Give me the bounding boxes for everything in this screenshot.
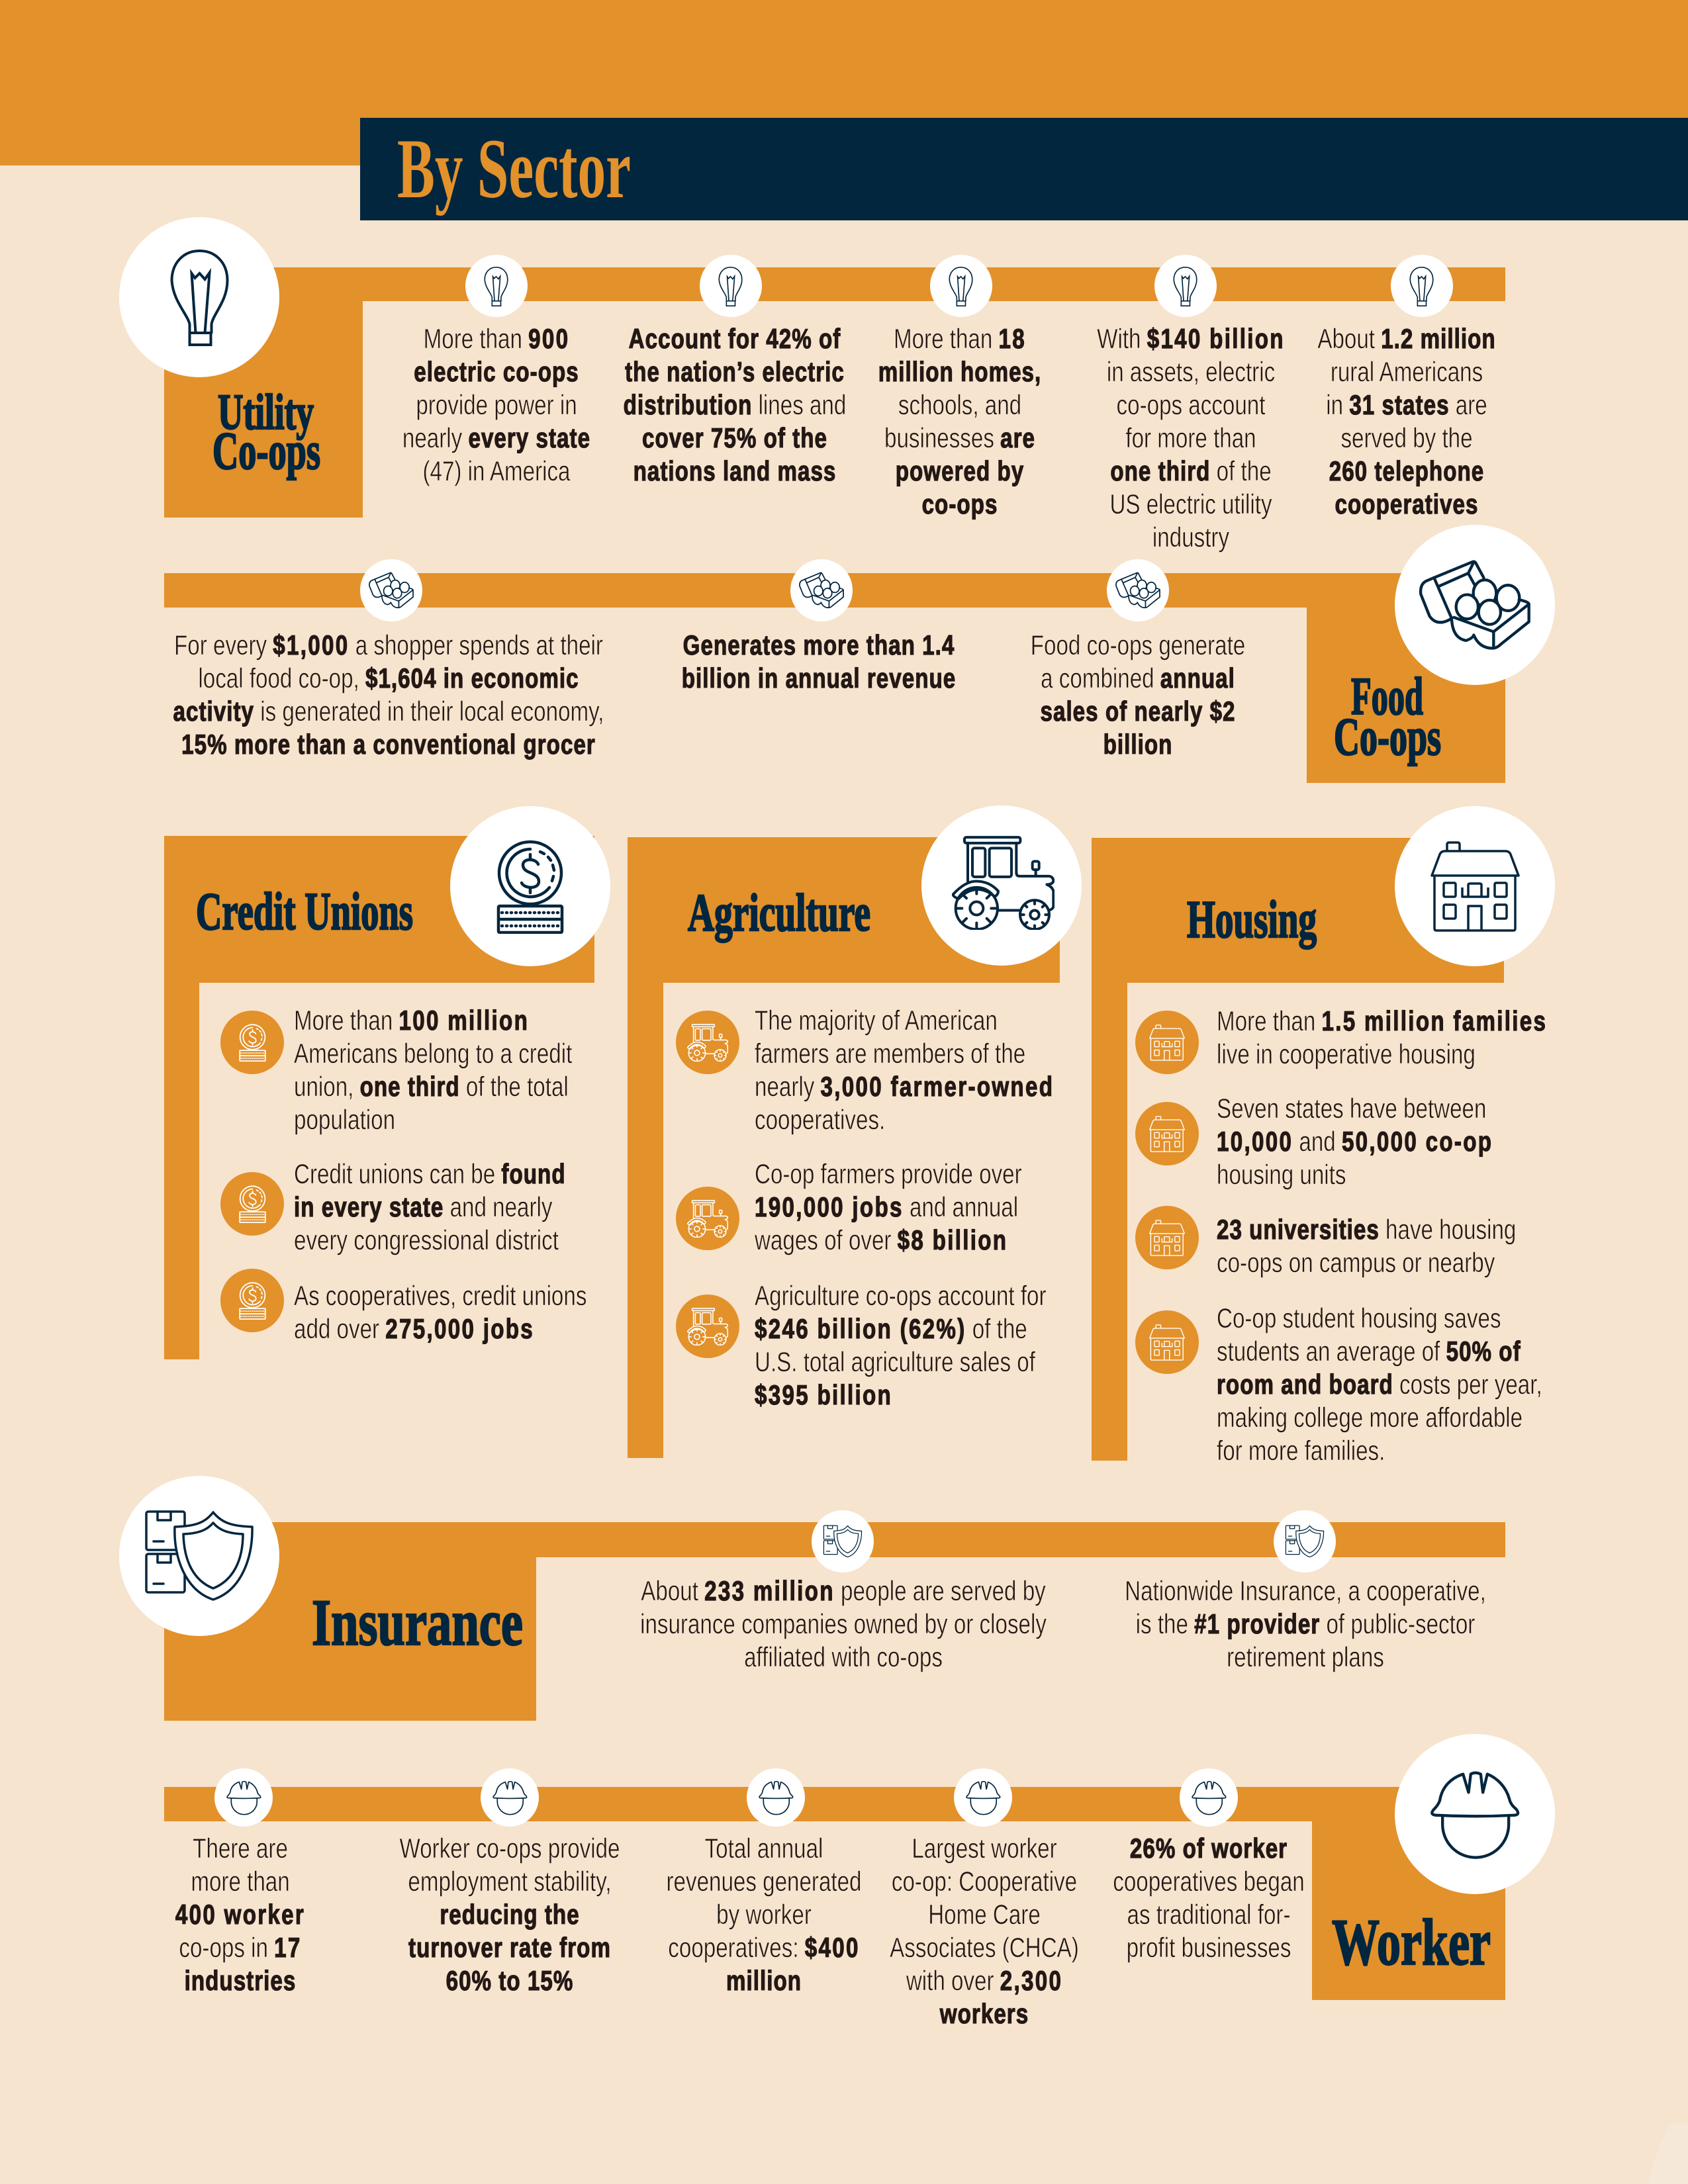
text: largest worker co-op: Largest worker <box>912 1833 1057 1864</box>
heading: agriculture: Agriculture <box>688 884 870 942</box>
text: distribution lines: distribution lines and <box>624 390 846 421</box>
text: assets: for more than <box>1125 423 1256 454</box>
text: agriculture list: Co-op farmers provide over <box>755 1159 1022 1190</box>
text: largest worker co-op: Associates (CHCA) <box>890 1933 1079 1964</box>
text: people served <box>640 1576 1047 1673</box>
text: distribution lines: nations land mass <box>633 456 836 487</box>
text: annual revenue: billion in annual revenue <box>682 663 956 694</box>
text: agriculture list: cooperatives. <box>755 1105 885 1136</box>
text: electric co-ops count: More than 900 <box>424 324 569 355</box>
text: worker co-op count: co-ops in 17 <box>179 1933 302 1964</box>
text: annual revenue: Generates more than 1.4 <box>683 630 955 661</box>
text: agriculture list: $395 billion <box>755 1380 892 1411</box>
small tractor icons <box>676 1011 739 1358</box>
text: credit union list: More than 100 million <box>294 1005 529 1036</box>
icon: shield large <box>119 1476 279 1636</box>
text: homes powered: million homes, <box>878 357 1041 388</box>
small egg icons <box>360 559 1169 621</box>
text: annual revenues: by worker <box>716 1899 812 1931</box>
panel: utility co-ops <box>119 217 1505 553</box>
title banner: By Sector <box>397 122 631 216</box>
small bulb icons <box>465 255 1453 317</box>
heading: worker: Worker <box>1332 1905 1491 1979</box>
text: housing list: Seven states have between <box>1217 1093 1486 1124</box>
text: homes powered: More than 18 <box>894 324 1026 355</box>
text: traditional businesses: cooperatives began <box>1113 1866 1305 1897</box>
text: credit union list: Americans belong to a credit <box>294 1038 573 1069</box>
text: housing list <box>1217 1006 1547 1467</box>
text: annual sales <box>1031 630 1245 760</box>
text: annual revenues <box>666 1833 862 1997</box>
text: annual revenue <box>682 630 956 694</box>
text: traditional businesses: profit businesses <box>1127 1933 1291 1964</box>
text: people served: insurance companies owned by or closely <box>640 1609 1047 1640</box>
text: housing list: 10,000 and 50,000 co-op <box>1217 1126 1493 1158</box>
text: nationwide: Nationwide Insurance, a cooperative, <box>1125 1576 1486 1607</box>
heading: utility co-ops <box>212 385 320 480</box>
text: housing list: students an average of 50% of <box>1217 1336 1521 1367</box>
text: distribution lines: Account for 42% of <box>629 324 841 355</box>
text: agriculture list: farmers are members of the <box>755 1038 1025 1069</box>
panel: credit unions <box>164 806 610 1359</box>
heading: food co-ops <box>1334 668 1441 766</box>
text: credit union list: population <box>294 1105 395 1136</box>
text: largest worker co-op <box>890 1833 1079 2030</box>
small coin icons <box>220 1011 284 1332</box>
text: telephone cooperatives: in 31 states are <box>1326 390 1487 421</box>
text: employment stability <box>400 1833 620 1997</box>
icon: coin large <box>450 806 610 966</box>
text: credit union list: union, one third of the total <box>294 1071 569 1103</box>
text: agriculture list <box>754 1005 1054 1411</box>
small helmet icons <box>214 1768 1238 1827</box>
text: employment stability: Worker co-ops provide <box>400 1833 620 1864</box>
text: annual revenues: Total annual <box>705 1833 823 1864</box>
text: electric co-ops count: electric co-ops <box>414 357 579 388</box>
panel: food co-ops <box>164 525 1555 783</box>
text: traditional businesses: as traditional for- <box>1127 1899 1291 1931</box>
heading: credit unions: Credit Unions <box>196 883 413 941</box>
text: worker co-op count <box>175 1833 305 1997</box>
icon: tractor large <box>921 805 1082 966</box>
text: telephone cooperatives <box>1317 324 1496 520</box>
text: largest worker co-op: co-op: Cooperative <box>892 1866 1077 1897</box>
panel: housing <box>1092 806 1555 1467</box>
text: housing list: housing units <box>1217 1160 1346 1191</box>
text: economic activity <box>173 630 604 760</box>
text: annual revenues: revenues generated <box>666 1866 862 1897</box>
text: homes powered: powered by <box>896 456 1024 487</box>
text: largest worker co-op: with over 2,300 <box>906 1966 1062 1997</box>
panel: insurance <box>119 1476 1505 1721</box>
text: homes powered: businesses are <box>884 423 1035 454</box>
top orange banner <box>0 0 1688 165</box>
text: credit union list: in every state and nearly <box>294 1192 553 1223</box>
text: assets: With $140 billion <box>1097 324 1285 355</box>
text: worker co-op count: There are <box>193 1833 288 1864</box>
text: telephone cooperatives: About 1.2 million <box>1317 324 1496 355</box>
text: assets: industry <box>1152 522 1229 553</box>
text: housing list: live in cooperative housing <box>1217 1039 1476 1070</box>
text: annual revenues: cooperatives: $400 <box>668 1933 860 1964</box>
text: assets: in assets, electric <box>1107 357 1275 388</box>
heading: utility co-ops: Utility <box>218 385 314 440</box>
text: economic activity: local food co-op, $1,604 in economic <box>198 663 579 694</box>
text: credit union list <box>294 1005 586 1345</box>
icon: house large <box>1395 806 1555 966</box>
text: homes powered <box>878 324 1041 520</box>
text: economic activity: 15% more than a conventional grocer <box>181 729 596 760</box>
text: electric co-ops count <box>402 324 590 487</box>
text: housing list: co-ops on campus or nearby <box>1217 1248 1495 1279</box>
panel: agriculture <box>628 805 1082 1458</box>
text: housing list: More than 1.5 million families <box>1217 1006 1547 1037</box>
text: traditional businesses: 26% of worker <box>1130 1833 1288 1864</box>
text: distribution lines: cover 75% of the <box>642 423 827 454</box>
text: credit union list: every congressional district <box>294 1225 559 1256</box>
text: employment stability: 60% to 15% <box>446 1966 573 1997</box>
text: largest worker co-op: Home Care <box>928 1899 1041 1931</box>
text: housing list: 23 universities have housing <box>1217 1214 1516 1246</box>
text: assets <box>1097 324 1285 553</box>
text: assets: one third of the <box>1110 456 1272 487</box>
text: electric co-ops count: nearly every state <box>402 423 590 454</box>
text: distribution lines: the nation’s electric <box>625 357 845 388</box>
text: nationwide: retirement plans <box>1227 1642 1384 1673</box>
text: housing list: making college more affordable <box>1217 1402 1523 1433</box>
text: credit union list: add over 275,000 jobs <box>294 1314 534 1345</box>
text: annual revenues: million <box>726 1966 802 1997</box>
text: traditional businesses <box>1113 1833 1305 1964</box>
text: agriculture list: wages of over $8 billion <box>754 1225 1008 1256</box>
text: worker co-op count: 400 worker <box>175 1899 305 1931</box>
small house icons <box>1135 1011 1199 1374</box>
text: agriculture list: nearly 3,000 farmer-owned <box>755 1071 1054 1103</box>
text: worker co-op count: industries <box>185 1966 296 1997</box>
text: agriculture list: U.S. total agriculture sales of <box>755 1347 1035 1378</box>
text: credit union list: As cooperatives, credit unions <box>294 1281 586 1312</box>
text: housing list: room and board costs per year, <box>1217 1369 1542 1400</box>
text: distribution lines <box>624 324 846 487</box>
text: agriculture list: The majority of American <box>755 1005 998 1036</box>
heading: food co-ops: Food <box>1351 668 1423 726</box>
text: employment stability: turnover rate from <box>408 1933 611 1964</box>
text: housing list: for more families. <box>1217 1435 1385 1467</box>
text: homes powered: co-ops <box>922 489 998 520</box>
text: agriculture list: Agriculture co-ops account for <box>755 1281 1047 1312</box>
title banner <box>360 118 1688 220</box>
text: electric co-ops count: provide power in <box>416 390 577 421</box>
text: electric co-ops count: (47) in America <box>422 456 571 487</box>
smudge at bottom right corner <box>1648 2123 1688 2184</box>
heading: food co-ops: Co-ops <box>1334 708 1441 766</box>
text: nationwide <box>1125 1576 1486 1673</box>
text: economic activity: For every $1,000 a shopper spends at their <box>174 630 603 661</box>
icon: egg carton large <box>1395 525 1555 685</box>
text: housing list: Co-op student housing saves <box>1217 1303 1501 1334</box>
panel: worker <box>164 1734 1555 2030</box>
text: annual sales: Food co-ops generate <box>1031 630 1245 661</box>
text: telephone cooperatives: cooperatives <box>1335 489 1478 520</box>
text: annual sales: sales of nearly $2 <box>1040 696 1236 727</box>
text: annual sales: a combined annual <box>1041 663 1235 694</box>
text: people served: About 233 million people are served by <box>641 1576 1046 1607</box>
icon: helmet large <box>1395 1734 1555 1894</box>
text: assets: US electric utility <box>1109 489 1272 520</box>
text: agriculture list: $246 billion (62%) of the <box>755 1314 1027 1345</box>
text: agriculture list: 190,000 jobs and annual <box>755 1192 1018 1223</box>
text: employment stability: reducing the <box>440 1899 580 1931</box>
text: economic activity: activity is generated in their local economy, <box>173 696 604 727</box>
heading: utility co-ops: Co-ops <box>212 422 320 480</box>
text: homes powered: schools, and <box>898 390 1021 421</box>
heading: housing: Housing <box>1187 891 1317 949</box>
text: telephone cooperatives: served by the <box>1340 423 1473 454</box>
text: assets: co-ops account <box>1117 390 1266 421</box>
text: worker co-op count: more than <box>191 1866 290 1897</box>
text: telephone cooperatives: rural Americans <box>1331 357 1483 388</box>
small shield icons <box>812 1510 1336 1572</box>
text: telephone cooperatives: 260 telephone <box>1329 456 1484 487</box>
heading: insurance: Insurance <box>312 1586 523 1659</box>
icon: light bulb large <box>119 217 279 377</box>
text: largest worker co-op: workers <box>939 1999 1029 2030</box>
text: employment stability: employment stability, <box>408 1866 612 1897</box>
text: credit union list: Credit unions can be found <box>294 1159 566 1190</box>
text: annual sales: billion <box>1103 729 1172 760</box>
text: people served: affiliated with co-ops <box>744 1642 943 1673</box>
text: nationwide: is the #1 provider of public-sector <box>1136 1609 1475 1640</box>
